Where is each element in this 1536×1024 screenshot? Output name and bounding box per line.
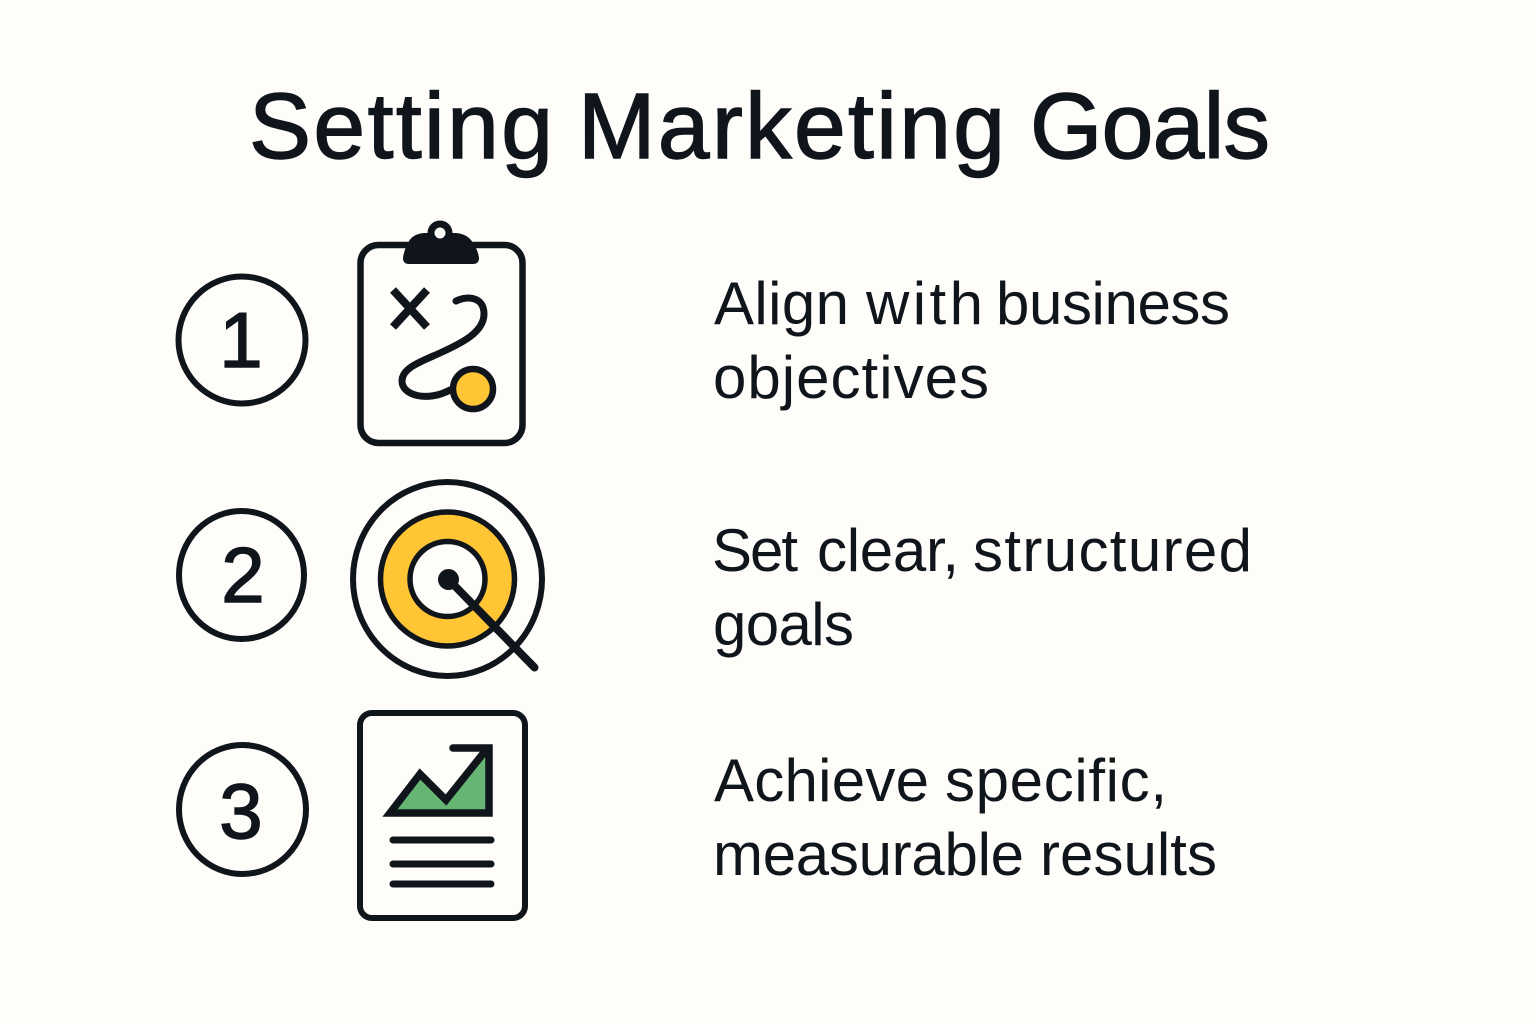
text: step 1: Align bbox=[714, 270, 849, 337]
icon: report with growth chart bbox=[360, 713, 525, 918]
text: step 1 bbox=[713, 270, 1230, 411]
text: step 2: clear, bbox=[817, 517, 959, 584]
text: step 2: structured bbox=[973, 517, 1252, 584]
title: Marketing bbox=[578, 74, 1005, 178]
text: step 2: Set bbox=[712, 517, 798, 584]
title: Setting bbox=[249, 74, 553, 178]
number badge 1 bbox=[178, 276, 306, 404]
title: Goals bbox=[1030, 74, 1270, 178]
step 2 row bbox=[179, 482, 1252, 676]
text: step 3: Achieve bbox=[714, 747, 929, 814]
number badge 3 bbox=[179, 745, 306, 874]
text: step 3: specific, bbox=[945, 747, 1167, 814]
text: step 2 bbox=[712, 517, 1252, 658]
number badge 1: 1 bbox=[219, 296, 263, 384]
text: step 3: measurable bbox=[713, 821, 1024, 888]
text: step 3: results bbox=[1040, 821, 1217, 888]
number badge 2 bbox=[179, 511, 304, 639]
number badge 2: 2 bbox=[221, 531, 265, 619]
icon: clipboard with strategy path bbox=[360, 224, 522, 443]
text: step 1: with bbox=[865, 270, 983, 337]
icon: target with arrow bbox=[353, 482, 542, 676]
text: step 1: objectives bbox=[713, 344, 989, 411]
text: step 1: business bbox=[996, 270, 1230, 337]
step 1 row bbox=[178, 224, 1230, 443]
number badge 3: 3 bbox=[219, 767, 263, 855]
text: step 3 bbox=[713, 747, 1217, 888]
title bbox=[249, 74, 1270, 178]
step 3 row bbox=[179, 713, 1217, 918]
text: step 2: goals bbox=[713, 591, 854, 658]
